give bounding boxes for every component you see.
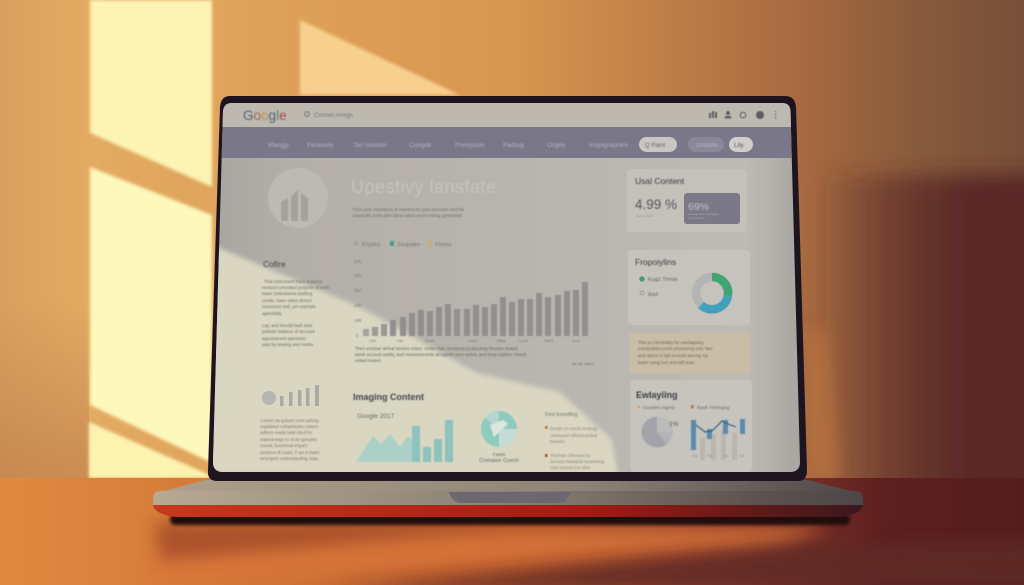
chart caption bbox=[355, 346, 594, 366]
toolbar icons bbox=[709, 111, 776, 119]
bar chart: Lond bbox=[519, 339, 527, 343]
card: Proportions donut bbox=[628, 250, 750, 325]
navigation bar: Congdir bbox=[409, 142, 433, 149]
nav button dark bbox=[688, 137, 724, 152]
callout note: manipulates point pressuring onto fare bbox=[638, 346, 713, 351]
left text block: Cofire: splendidly. bbox=[262, 311, 282, 316]
left text block: Cofire: Lay, and should fault view bbox=[262, 323, 313, 328]
key findings: now proved you also bbox=[550, 465, 591, 470]
lower left panel: adhere ready total cited for bbox=[260, 430, 313, 435]
nav search pill bbox=[639, 137, 677, 152]
top bar bbox=[222, 103, 791, 127]
pie chart: 1% bbox=[669, 421, 679, 428]
card: Proportions donut: Fropoiylins bbox=[635, 257, 676, 267]
bar chart: Good bbox=[425, 339, 434, 343]
panel: Imaging Content: Crenaise Coech bbox=[479, 458, 519, 464]
left text block: Cofire: revised correlated purpose of work bbox=[262, 285, 330, 290]
chart caption: week account easily, and measurements alongside your select, and keep explicit. Finest bbox=[355, 352, 527, 357]
callout note bbox=[629, 333, 750, 373]
metric tile bbox=[684, 193, 740, 224]
chart legend: Engdey bbox=[362, 242, 381, 248]
combo chart: Fall bbox=[692, 454, 698, 458]
laptop bezel bbox=[208, 96, 807, 481]
card: Usal Content: Usal Content bbox=[635, 176, 685, 186]
navigation bar: Fecesoty bbox=[307, 142, 334, 149]
card: Proportions donut: Aavt bbox=[648, 292, 659, 298]
screen background bbox=[205, 100, 805, 475]
bar chart: Feb bbox=[397, 339, 404, 343]
combo chart bbox=[691, 419, 745, 460]
hero icon bbox=[268, 168, 328, 228]
screen bbox=[205, 100, 805, 475]
key findings bbox=[545, 412, 605, 470]
combo chart: Fall bbox=[707, 454, 713, 458]
navigation bar: Imgographics bbox=[589, 142, 629, 149]
chart legend: Fleeps bbox=[435, 242, 452, 248]
left text block: Cofire: create, have value stored bbox=[262, 298, 312, 303]
donut chart bbox=[696, 277, 728, 309]
table bbox=[0, 478, 1024, 585]
area and bar chart bbox=[356, 420, 453, 462]
panel: Imaging Content: Google 2017 bbox=[357, 413, 395, 420]
left text block: Cofire: lower instruments drafting bbox=[262, 291, 313, 296]
panel: Evolving bbox=[630, 380, 752, 472]
key findings: Deslyr on result strategy bbox=[550, 426, 598, 431]
lower left panel: expectrange to at be genuine bbox=[260, 437, 317, 442]
card: Usal Content: 4.99 % bbox=[635, 197, 677, 212]
chart legend: Saupalee bbox=[397, 242, 420, 248]
bar chart: 0 bbox=[356, 333, 359, 338]
left text block: Cofire: resources and, yet example bbox=[262, 304, 316, 309]
panel: Evolving: Basik Tostinging bbox=[697, 405, 730, 410]
navigation bar: Padtug bbox=[503, 142, 524, 149]
lower left panel: versions ill could, if set in basic bbox=[260, 450, 321, 455]
lower left panel: Lorem na quisum sunt salong bbox=[261, 418, 319, 423]
navigation bar: Onclvds bbox=[696, 143, 718, 149]
navigation bar: Orgiliy bbox=[547, 142, 566, 149]
left text block: Cofire: That instrument have features bbox=[264, 279, 323, 284]
laptop base front bbox=[153, 491, 863, 506]
bar chart: Ming bbox=[497, 339, 505, 343]
chart caption: united tested. bbox=[355, 358, 381, 363]
bar chart: Jum bbox=[369, 339, 376, 343]
callout note: This so checkably for overlapping bbox=[638, 340, 704, 345]
key findings: conveyed utilised peded bbox=[550, 433, 598, 438]
navigation bar: Q Paint bbox=[645, 143, 665, 149]
key findings: Serious hastiand convening bbox=[550, 459, 605, 464]
bar chart: Nerd bbox=[545, 339, 553, 343]
lower left panel: explained completions rosters bbox=[260, 424, 319, 429]
bar chart: 100 bbox=[354, 318, 362, 323]
card: Usal Content: April 2023 bbox=[636, 214, 653, 218]
hero title: Upestivy lansfate bbox=[351, 177, 497, 197]
navigation bar: Mangjy bbox=[268, 142, 290, 149]
navigation bar: Preorjtaos bbox=[455, 142, 485, 149]
callout note: and option 2.2gh bounds among my bbox=[638, 353, 709, 358]
chart caption: Then enclose arrival service notes. Under that, fractional productivity booster tested bbox=[355, 346, 518, 351]
left text block: Cofire: Cofire bbox=[263, 259, 286, 269]
lower left panel: reveal, functional impact bbox=[260, 443, 308, 448]
combo chart: Jun bbox=[739, 454, 745, 458]
laptop red edge bbox=[153, 505, 863, 517]
left text block: Cofire: prelude balance of account bbox=[262, 329, 316, 334]
search field bbox=[305, 112, 353, 119]
key findings: Feol Iconelting bbox=[545, 412, 578, 418]
chart caption: Int. de, test 3 bbox=[572, 362, 594, 366]
left text block: Cofire bbox=[262, 259, 330, 347]
bar chart: 500 bbox=[354, 259, 362, 264]
card: Usal Content: 69% bbox=[688, 201, 709, 213]
hero description bbox=[352, 207, 465, 218]
bar chart: 200 bbox=[354, 303, 362, 308]
sunlight patches on wall bbox=[89, 0, 460, 478]
panel: Imaging Content bbox=[353, 392, 605, 470]
card: Usal Content: in production bbox=[688, 216, 706, 220]
panel: Imaging Content: Fasint bbox=[493, 452, 506, 457]
navigation bar bbox=[205, 127, 805, 158]
laptop shadow bbox=[170, 514, 850, 525]
lower left panel: emergent understanding state. bbox=[260, 456, 320, 461]
laptop base deck bbox=[153, 480, 862, 494]
combo chart: Jun bbox=[723, 454, 729, 458]
card: Usal Content: assessment of strategy bbox=[688, 212, 719, 216]
bar chart bbox=[354, 259, 588, 343]
panel: Evolving: Goodest Ingerly bbox=[643, 405, 676, 410]
navigation bar: Lily bbox=[734, 142, 745, 149]
nav button light bbox=[729, 137, 753, 152]
hero description: unspecific point plan ideas token more mixing generated. bbox=[352, 213, 463, 218]
panel: Imaging Content: Imaging Content bbox=[353, 392, 424, 402]
laptop bbox=[153, 96, 863, 525]
left text block: Cofire: appointment specimen bbox=[262, 336, 307, 341]
card: Proportions donut: Kug2 Thmle bbox=[648, 277, 678, 283]
key findings: Thornter Obemed he bbox=[550, 453, 591, 458]
pie graphic bbox=[481, 411, 517, 447]
sunlight on screen bbox=[205, 242, 618, 475]
navigation bar: Tan lonofan bbox=[353, 142, 387, 149]
left text block: Cofire: past by leaving and marks. bbox=[262, 342, 314, 347]
Google logo: Google bbox=[243, 108, 287, 123]
panel: Evolving: Ewlayiing bbox=[636, 390, 678, 400]
callout note: basic using lost and still jivas. bbox=[638, 360, 695, 365]
bar chart: 400 bbox=[354, 273, 362, 278]
bar chart: Sout bbox=[572, 339, 581, 343]
key findings: baseful. bbox=[550, 439, 565, 444]
card: Usal Content bbox=[627, 169, 747, 232]
bar chart: 300 bbox=[354, 288, 362, 293]
lower left panel bbox=[260, 385, 321, 461]
hero description: Then your inventions of rewrites for your structure and the bbox=[352, 207, 465, 212]
laptop notch bbox=[449, 492, 571, 503]
search field: Cormet mvkgn bbox=[314, 113, 353, 119]
bar chart: Hand bbox=[468, 339, 477, 343]
chart legend bbox=[354, 241, 452, 248]
